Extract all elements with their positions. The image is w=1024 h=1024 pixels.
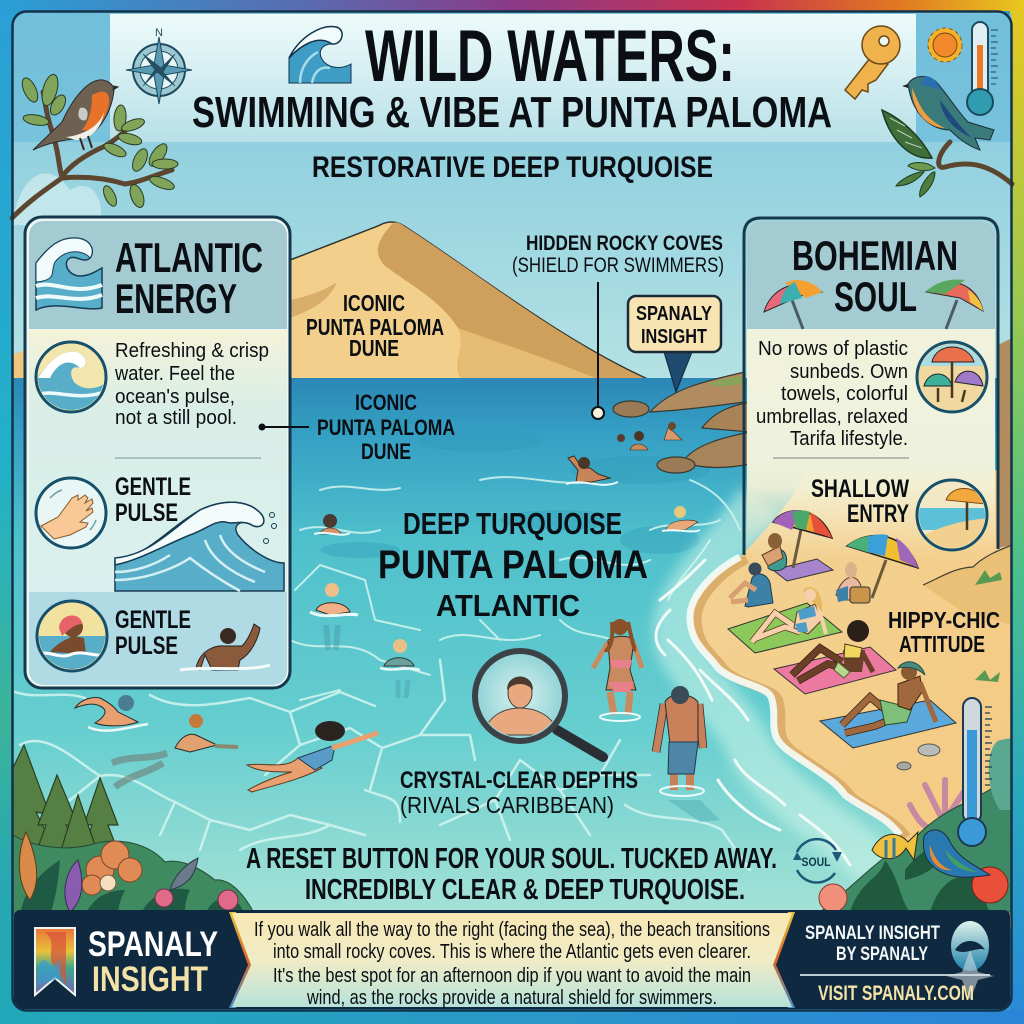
- title panel: [110, 14, 916, 142]
- shallow entry label: ENTRY: [847, 500, 909, 528]
- icon: compass: [126, 27, 192, 104]
- woman seated with knees up: [762, 533, 787, 571]
- credit text: SPANALY INSIGHT: [805, 923, 940, 944]
- panel heading: SOUL: [834, 273, 917, 320]
- icon: bottom thermometer: [958, 698, 992, 846]
- gentle pulse label two: PULSE: [115, 632, 178, 660]
- woman on green towel: [752, 587, 826, 642]
- callout: Spanaly Insight: [628, 296, 721, 392]
- icon: left bird on branch: [12, 73, 178, 218]
- intro text: Tarifa lifestyle.: [790, 428, 908, 450]
- icon: soul cycle: [793, 839, 842, 883]
- insight text: [254, 919, 770, 1009]
- panel outline: [744, 218, 998, 555]
- dark leaves: [21, 860, 242, 910]
- divider: [773, 457, 909, 459]
- panel fill: [747, 221, 995, 561]
- subtitle: SWIMMING & VIBE AT PUNTA PALOMA: [192, 88, 832, 137]
- shore streaks: [656, 560, 850, 865]
- icon: lower right bird: [923, 830, 990, 877]
- icon: swimmer in circle: [36, 601, 108, 676]
- slogan: [246, 843, 777, 906]
- bird body: [33, 80, 118, 150]
- magnifier: [475, 651, 603, 757]
- coral: [910, 780, 965, 831]
- label: crystal clear: CRYSTAL-CLEAR DEPTHS: [400, 767, 638, 794]
- label: crystal clear: (RIVALS CARIBBEAN): [400, 792, 614, 818]
- website: VISIT SPANALY.COM: [818, 982, 974, 1005]
- gentle pulse label two: [115, 606, 191, 660]
- slogan: A RESET BUTTON FOR YOUR SOUL. TUCKED AWAY.: [246, 843, 777, 875]
- dune label: ICONIC: [343, 290, 405, 316]
- slogan: INCREDIBLY CLEAR & DEEP TURQUOISE.: [305, 874, 745, 906]
- swimmer with teal top: [380, 639, 420, 698]
- intro text: [756, 338, 908, 450]
- center water title: ATLANTIC: [436, 588, 580, 623]
- top left sky tint: [12, 12, 110, 142]
- water caustic ripples: [15, 477, 750, 870]
- icon: top thermometer: [967, 22, 998, 115]
- icon: shallow entry circle: [915, 480, 990, 552]
- sea label: iconic dune: [317, 390, 455, 464]
- icon: umbrella right: [926, 280, 983, 329]
- credit text: [805, 923, 940, 965]
- label: hidden rocky coves: (SHIELD FOR SWIMMERS): [512, 254, 724, 277]
- insight text: If you walk all the way to the right (facing the sea), the beach transitions: [254, 919, 770, 941]
- icon: heading wave: [36, 238, 102, 310]
- top right sky tint: [916, 14, 1012, 142]
- ribbon left edge: [229, 912, 255, 1008]
- intro text: sunbeds. Own: [790, 361, 908, 383]
- panel heading: BOHEMIAN: [792, 232, 958, 279]
- gentle pulse label one: [115, 473, 191, 527]
- icon: compass: N: [155, 27, 163, 39]
- bottom band: [14, 910, 1010, 1009]
- foliage mound: [820, 770, 1012, 912]
- brand name: SPANALY: [88, 925, 218, 964]
- label: hippy chic: HIPPY-CHIC: [888, 607, 1000, 633]
- intro text: [114, 340, 269, 429]
- icon: right bird on branch: [882, 76, 1012, 197]
- sparkle: [946, 950, 994, 1000]
- connector: coves: [592, 282, 604, 419]
- orange shrub: [82, 841, 142, 895]
- callout: Spanaly Insight: SPANALY: [636, 303, 713, 325]
- pine trees: [14, 744, 119, 848]
- icon: spanaly logo: [951, 921, 989, 971]
- swimmer in blue suit: [247, 721, 378, 792]
- label: crystal clear: [400, 767, 638, 818]
- panel body: [29, 330, 287, 592]
- sunbathers group: [728, 510, 1002, 770]
- credit divider: [800, 974, 990, 976]
- panel frame: [25, 217, 290, 688]
- orange fern: [19, 832, 37, 900]
- swimmer waving: [180, 624, 270, 670]
- icon: sun: [928, 28, 962, 62]
- intro text: Refreshing & crisp: [115, 340, 269, 362]
- cloud: [12, 173, 101, 225]
- label: hippy chic: ATTITUDE: [899, 631, 985, 657]
- insight ribbon: [232, 913, 792, 1007]
- wet sand edge: [697, 559, 907, 837]
- right hill: [923, 545, 1012, 625]
- woman on pink towel: [792, 620, 873, 681]
- pink flowers: [155, 889, 238, 910]
- panel: Atlantic Energy: [25, 217, 290, 688]
- swimmer raising arm: [566, 456, 618, 485]
- label: hidden rocky coves: HIDDEN ROCKY COVES: [526, 232, 723, 255]
- icon: circle wave: [36, 342, 106, 412]
- grey fern: [170, 858, 198, 890]
- gentle pulse label one: PULSE: [115, 499, 178, 527]
- lower band: [29, 592, 287, 688]
- sea label: iconic dune: DUNE: [361, 439, 411, 464]
- man on blue towel: [842, 662, 936, 733]
- towel: blue: [820, 700, 956, 748]
- center water title: DEEP TURQUOISE: [403, 506, 622, 541]
- insight text: It's the best spot for an afternoon dip if you want to avoid the main: [273, 965, 751, 987]
- towel: purple: [773, 559, 833, 581]
- intro text: not a still pool.: [115, 407, 237, 429]
- person sitting in blue wrap: [730, 562, 773, 607]
- icon: rainbow ribbon: [35, 928, 75, 995]
- far left shore: [14, 350, 24, 378]
- sea label: iconic dune: PUNTA PALOMA: [317, 415, 455, 440]
- callout: Spanaly Insight: INSIGHT: [641, 326, 707, 348]
- panel heading: ENERGY: [115, 275, 237, 322]
- beach umbrella one: [773, 510, 832, 568]
- icon: umbrella left: [764, 280, 822, 329]
- shallow entry label: [811, 475, 909, 528]
- breaststroke swimmer: [112, 714, 238, 787]
- swimmers in the sea: [75, 422, 700, 792]
- label: hidden rocky coves: [512, 232, 724, 277]
- shore glow: [676, 500, 880, 870]
- icon: umbrellas circle: [915, 340, 989, 412]
- sky: [12, 12, 1012, 382]
- panel heading: ATLANTIC: [115, 234, 263, 281]
- label: hippy chic: [888, 607, 1000, 657]
- insight text: into small rocky coves. This is where the Atlantic gets even clearer.: [273, 941, 751, 963]
- tagline: RESTORATIVE DEEP TURQUOISE: [312, 151, 713, 184]
- center water title: PUNTA PALOMA: [378, 543, 648, 587]
- brand name: [88, 925, 218, 999]
- swimmer near surf: [662, 506, 700, 531]
- panel header band: [29, 221, 287, 329]
- front crawl swimmer: [75, 695, 148, 731]
- dark leaves: [850, 844, 990, 912]
- beach umbrella two: [847, 534, 918, 598]
- credit text: BY SPANALY: [836, 944, 928, 965]
- towel: green: [728, 603, 842, 653]
- icon: key: [845, 26, 900, 99]
- pebbles: [918, 744, 940, 756]
- purple fern: [65, 860, 82, 912]
- woman swimmer: [314, 514, 350, 535]
- red hibiscus: [972, 867, 1008, 903]
- sea: [12, 378, 1012, 918]
- wading woman: [593, 619, 642, 721]
- right cliff: [1000, 338, 1010, 548]
- insight text: wind, as the rocks provide a natural shield for swimmers.: [306, 987, 717, 1009]
- icon: soul cycle: SOUL: [802, 855, 830, 869]
- icon: fish: [872, 832, 918, 860]
- ribbon right edge: [769, 912, 795, 1008]
- brand name: INSIGHT: [92, 960, 208, 999]
- wave logo: [289, 27, 351, 83]
- intro text: No rows of plastic: [758, 338, 908, 360]
- intro text: ocean's pulse,: [115, 386, 235, 408]
- intro text: umbrellas, relaxed: [756, 406, 908, 428]
- hill tuft: [975, 570, 1002, 585]
- connector: dune label: [258, 424, 309, 430]
- foam line: [690, 557, 900, 835]
- wading man: [656, 686, 720, 822]
- dune label: [306, 290, 444, 361]
- beach sand: [690, 470, 1012, 930]
- foliage: [13, 835, 255, 915]
- panel heading: [792, 232, 958, 320]
- center water title: [378, 506, 648, 623]
- icon: hand: [36, 478, 106, 548]
- gentle pulse label one: GENTLE: [115, 473, 191, 501]
- dune label: PUNTA PALOMA: [306, 314, 444, 340]
- divider: [115, 457, 261, 459]
- person reading by basket: [836, 562, 870, 603]
- shallow entry label: SHALLOW: [811, 475, 909, 503]
- blond swimmer: [310, 583, 358, 650]
- intro text: towels, colorful: [781, 383, 908, 405]
- coastal rocks: [613, 372, 750, 473]
- towel: pink: [774, 647, 896, 694]
- coral flower: [819, 884, 847, 912]
- big wave illustration: [115, 502, 284, 591]
- gentle pulse label two: GENTLE: [115, 606, 191, 634]
- dune: [285, 222, 650, 380]
- sea label: iconic dune: ICONIC: [355, 390, 417, 415]
- distant swimmers: [617, 422, 682, 450]
- dune label: DUNE: [349, 335, 399, 361]
- panel: Bohemian Soul: [744, 218, 998, 561]
- main title: WILD WATERS:: [365, 16, 735, 97]
- panel heading: [36, 234, 263, 322]
- forest and flowers lower left: [12, 745, 255, 915]
- intro text: water. Feel the: [114, 363, 235, 385]
- dark water patches: [320, 510, 700, 558]
- beach tuft: [975, 670, 1000, 682]
- lower right plants: [819, 738, 1012, 912]
